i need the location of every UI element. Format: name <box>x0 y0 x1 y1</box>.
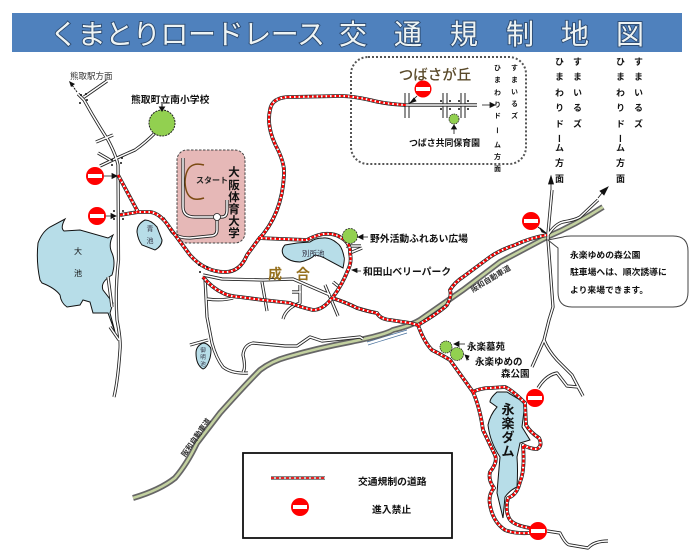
callout text: より来場できます。 <box>570 284 648 295</box>
pond: Aoike <box>137 220 162 250</box>
arrow: no entry west 2 <box>106 214 116 218</box>
icon: Eiraku Yume no Mori park <box>450 348 530 380</box>
cemetery label: 永楽墓苑 <box>467 341 506 353</box>
legend: no entry sign <box>291 498 309 516</box>
legend: restricted road label: 交通規制の道路 <box>358 475 427 488</box>
pond: Aoike: 池 <box>146 236 154 245</box>
callout: parking <box>548 236 688 307</box>
canal <box>367 327 407 345</box>
pond: Oike: 池 <box>74 268 82 278</box>
icon: no entry west 2 <box>88 207 116 225</box>
title banner: くまとりロードレース <box>50 19 325 50</box>
callout text: 駐車場へは、順次誘導に <box>570 266 667 277</box>
legend: restricted road sample <box>271 476 325 480</box>
label: Kumatori station direction <box>69 71 113 92</box>
icon: Minami elementary school <box>131 93 210 136</box>
label: Nariai district: 合 <box>296 266 310 282</box>
university name: 大 <box>228 214 240 228</box>
title banner: 地 <box>561 19 589 50</box>
plaza label: 野外活動ふれあい広場 <box>370 232 468 245</box>
start label: スタート <box>196 175 228 185</box>
callout text: 永楽ゆめの森公園 <box>570 249 641 260</box>
arrow: no entry Tsubasagaoka <box>410 96 417 103</box>
title banner: 規 <box>450 19 478 50</box>
park label: 森公園 <box>501 368 530 380</box>
arrow: nursery <box>452 125 456 134</box>
label: Wadayama Berry Park: 和田山ベリーパーク <box>363 265 451 278</box>
arrow: inset east <box>482 102 495 108</box>
icon: no entry north junction <box>522 212 546 233</box>
minor roads <box>78 81 608 548</box>
legend <box>243 453 452 538</box>
pond: Oike: 大 <box>74 246 82 256</box>
icon: no entry Tsubasagaoka <box>410 80 432 103</box>
label: Kumatori station direction: 熊取駅方面 <box>70 71 113 81</box>
arrow: no entry west 1 <box>104 174 117 178</box>
direction label: northeast Himawari Dome: ひまわりドーム方面 <box>615 57 625 184</box>
panel: Tsubasagaoka inset <box>351 57 526 164</box>
university name: 阪 <box>228 179 240 192</box>
university name: 体 <box>228 190 240 204</box>
arrow: cemetery <box>454 342 465 346</box>
junction dots <box>79 93 469 273</box>
arrow: northeast direction <box>598 187 608 198</box>
arrow: park <box>465 355 469 360</box>
expressway <box>133 207 603 498</box>
icon: Eiraku cemetery <box>440 341 506 353</box>
pond: Gomyo-ike: 池 <box>200 360 206 368</box>
arrow: school <box>160 104 164 111</box>
dam label: ム <box>501 444 515 459</box>
label: Nariai district: 成 <box>268 266 282 282</box>
pond: Aoike: 青 <box>146 224 154 233</box>
label: Nariai district <box>268 266 310 282</box>
pond: Bessho-ike <box>282 238 344 268</box>
title banner: 交 <box>339 19 367 50</box>
nursery label: つばさ共同保育園 <box>409 137 480 148</box>
arrow: to station <box>72 85 77 92</box>
arrow: Berry Park <box>352 268 361 272</box>
inset heading: つばさが丘 <box>399 66 471 84</box>
expressway label northeast: 阪和自動車道 <box>469 262 513 294</box>
legend: no entry label: 進入禁止 <box>372 503 411 516</box>
direction label: inset Himawari Dome: ひまわりドーム方面 <box>494 64 501 173</box>
traffic restricted roads <box>118 96 547 533</box>
icon: Tsubasa nursery <box>409 114 480 148</box>
dam label: ダ <box>501 430 515 445</box>
icon: outdoor activity plaza <box>342 228 468 245</box>
direction label: northeast Sumairuzu: すまいるズ <box>633 57 643 128</box>
university name: 学 <box>228 226 240 240</box>
pond: Gomyo-ike: 御 <box>200 346 206 354</box>
university name: 大 <box>228 167 240 179</box>
arrow: north direction <box>548 176 554 190</box>
campus roundabout <box>214 214 220 220</box>
university name: 育 <box>228 202 240 216</box>
arrow: no entry north junction <box>538 227 546 233</box>
arrow: plaza <box>358 234 368 240</box>
pond: Eiraku dam lake <box>488 392 530 518</box>
icon: no entry west 1 <box>86 167 117 185</box>
title banner: 図 <box>616 19 644 50</box>
icon: no entry dam north <box>526 389 544 407</box>
direction label: north Sumairuzu: すまいるズ <box>572 57 582 128</box>
direction label: inset Sumairuzu: すまいるズ <box>510 64 518 119</box>
dam label: 楽 <box>501 416 515 431</box>
title banner: 通 <box>394 19 422 50</box>
icon: no entry dam south <box>529 522 547 540</box>
pond: Gomyo-ike: 明 <box>200 354 206 361</box>
pond: Bessho-ike: 別所池 <box>302 248 325 258</box>
pond: Gomyo-ike <box>196 343 211 369</box>
park label: 永楽ゆめの <box>475 356 523 368</box>
title banner <box>12 13 682 52</box>
pond: Oike <box>37 219 115 332</box>
expressway label southwest: 阪和自動車道 <box>179 416 213 459</box>
dam label: 永 <box>501 402 515 417</box>
direction label: north Himawari Dome: ひまわりドーム方面 <box>554 57 564 184</box>
panel: Osaka University of Health and Sport Sciences <box>177 150 245 243</box>
start track <box>185 164 204 199</box>
school label: 熊取町立南小学校 <box>131 93 210 106</box>
title banner: 制 <box>506 19 534 50</box>
